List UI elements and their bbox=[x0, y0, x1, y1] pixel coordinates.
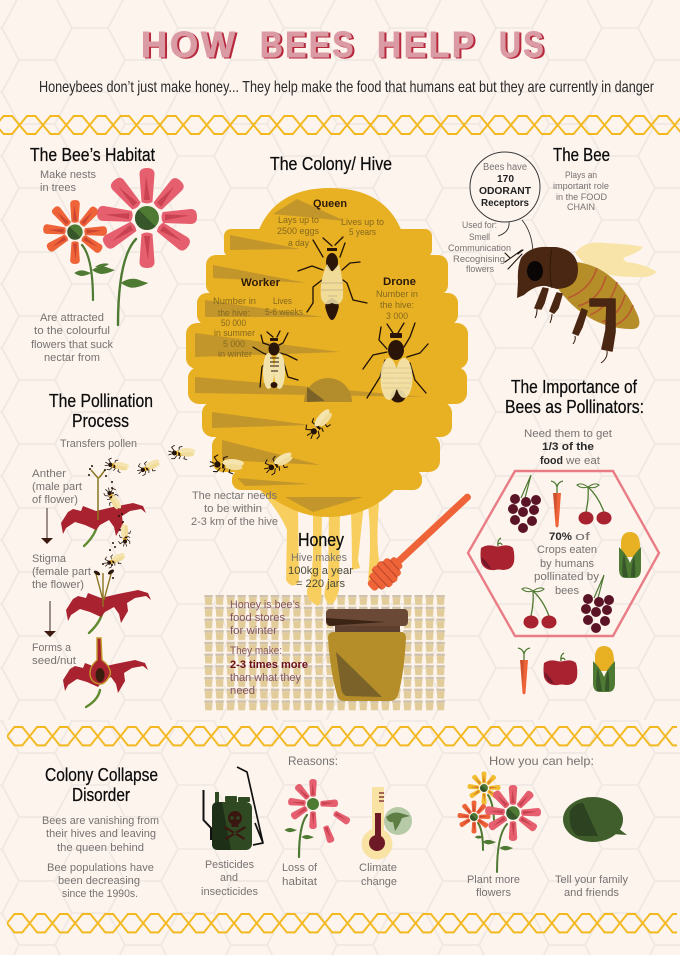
text: forms seed: Forms a bbox=[32, 642, 72, 654]
heading: importance: Bees as Pollinators: bbox=[505, 397, 644, 417]
text: food stores: food stores bbox=[230, 612, 286, 624]
icons: fruit and vegetables bbox=[480, 475, 641, 694]
callout: odorant receptors: 170 bbox=[497, 174, 514, 185]
text: tell family: Tell your family bbox=[555, 874, 628, 886]
honey drips bbox=[258, 488, 379, 606]
text: attracted: to the colourful bbox=[34, 325, 110, 337]
callout: odorant receptors: Bees have bbox=[483, 162, 527, 173]
hive labels: Drone bbox=[383, 276, 416, 288]
text: 70 percent bbox=[534, 531, 600, 597]
icon: flower with stigma bbox=[66, 542, 151, 633]
heading: importance: The Importance of bbox=[511, 377, 638, 397]
honeycomb divider top bbox=[0, 115, 680, 135]
text: food stores: They make: bbox=[230, 645, 282, 657]
hexagon frame bbox=[468, 471, 659, 636]
panel: pollination process bbox=[32, 391, 337, 707]
icon: honey jar bbox=[326, 609, 408, 701]
text: hive makes: Hive makes bbox=[291, 552, 347, 564]
text: anther: Anther bbox=[32, 468, 66, 480]
heading: colony: The Colony/ Hive bbox=[270, 154, 392, 174]
text: tell family bbox=[555, 874, 628, 899]
text: 70 percent: bees bbox=[555, 585, 579, 597]
honeycomb divider bottom bbox=[7, 913, 677, 933]
hive labels: Lives bbox=[273, 296, 292, 307]
honeycomb divider middle bbox=[7, 726, 677, 746]
text: transfers pollen: Transfers pollen bbox=[60, 438, 137, 450]
hive labels: 3 000 bbox=[386, 311, 408, 322]
icon: speech bubble bbox=[563, 797, 627, 842]
text: plays an important role: CHAIN bbox=[567, 202, 595, 212]
text: plays an important role bbox=[553, 170, 609, 212]
text: one third of food bbox=[524, 428, 612, 467]
text: populations: since the 1990s. bbox=[62, 888, 138, 900]
heading: pollination bbox=[49, 391, 153, 431]
text: nectar distance: 2-3 km of the hive bbox=[191, 516, 278, 528]
text: populations bbox=[47, 862, 154, 900]
text: used for: Communication bbox=[448, 243, 511, 253]
title: BEES bbox=[260, 24, 356, 65]
hive labels: Number in bbox=[376, 289, 418, 300]
text: nectar distance: to be within bbox=[204, 503, 262, 515]
heading: pollination: The Pollination bbox=[49, 391, 153, 411]
icon: damaged flower bbox=[284, 779, 351, 857]
hive labels: 5-6 weeks bbox=[265, 307, 303, 318]
text: vanishing: the queen behind bbox=[57, 842, 144, 854]
title: HOW bbox=[141, 24, 238, 65]
heading: honey: Honey bbox=[298, 530, 344, 550]
panel: honey bbox=[230, 485, 479, 701]
text: attracted: nectar from bbox=[44, 352, 100, 364]
panel: colony collapse disorder bbox=[42, 765, 159, 900]
text: used for: flowers bbox=[466, 264, 494, 274]
text: plant flowers: Plant more bbox=[467, 874, 520, 886]
hive labels: Number in bbox=[213, 296, 256, 307]
icon: orange flower bbox=[43, 200, 115, 300]
text: 70 percent: 70% bbox=[549, 531, 572, 543]
bee: worker bbox=[253, 331, 298, 389]
panel: bee's habitat bbox=[30, 145, 197, 364]
text: nests: Make nests bbox=[40, 169, 96, 181]
icon: honey dipper bbox=[362, 485, 479, 597]
text: plays an important role: in the FOOD bbox=[556, 192, 608, 202]
text: anther: of flower) bbox=[32, 494, 78, 506]
panel: importance as pollinators bbox=[468, 377, 659, 694]
text: anther bbox=[32, 468, 82, 506]
text: 70 percent: Crops eaten bbox=[537, 544, 597, 556]
bees: flying trail bbox=[102, 405, 337, 570]
text: plant flowers bbox=[467, 874, 520, 899]
text: loss of habitat bbox=[282, 862, 318, 888]
text: food stores: for winter bbox=[230, 625, 277, 637]
heading: collapse bbox=[45, 765, 158, 805]
text: food stores: 2-3 times more bbox=[230, 659, 308, 671]
text: forms seed: seed/nut bbox=[32, 655, 76, 667]
hive labels: 5 years bbox=[349, 227, 376, 238]
text: food stores: than what they bbox=[230, 672, 301, 684]
text: one third of food: food bbox=[540, 455, 563, 467]
text: attracted: Are attracted bbox=[40, 312, 104, 324]
text: stigma: (female part bbox=[32, 566, 91, 578]
text: pesticides bbox=[201, 859, 259, 898]
text: pesticides: and bbox=[220, 872, 238, 884]
text: food stores bbox=[230, 599, 308, 697]
text: anther: (male part bbox=[32, 481, 82, 493]
text: stigma bbox=[32, 553, 91, 591]
panel: the bee bbox=[448, 145, 657, 363]
text: climate change: change bbox=[361, 876, 397, 888]
hive shading bbox=[195, 199, 425, 512]
icon: flower with anther bbox=[61, 465, 146, 546]
text: used for: Smell bbox=[469, 232, 490, 242]
text: used for: Recognising bbox=[453, 254, 505, 264]
hive body bbox=[186, 188, 468, 517]
honey cups grid bbox=[204, 595, 447, 712]
heading: pollination: Process bbox=[72, 411, 129, 431]
text: nests: in trees bbox=[40, 182, 76, 194]
hive labels: in summer bbox=[214, 328, 255, 339]
hive labels: Queen bbox=[313, 198, 347, 210]
illustration: large bee bbox=[505, 242, 657, 363]
text: hive makes: = 220 jars bbox=[296, 578, 345, 590]
text: tell family: and friends bbox=[564, 887, 619, 899]
hive labels: Worker bbox=[241, 277, 281, 289]
text: populations: been decreasing bbox=[58, 875, 140, 887]
hive labels: a day bbox=[288, 238, 309, 249]
hive labels: the hive: bbox=[380, 300, 414, 311]
text: loss of habitat: habitat bbox=[282, 876, 317, 888]
text: plays an important role: Plays an bbox=[565, 170, 597, 180]
text: 70 percent: pollinated by bbox=[534, 571, 600, 583]
text: one third of food: we eat bbox=[565, 455, 600, 467]
text: stigma: the flower) bbox=[32, 579, 84, 591]
bee: queen bbox=[298, 237, 367, 320]
heading: help: How you can help: bbox=[489, 754, 594, 768]
hive labels: in winter bbox=[218, 349, 252, 360]
callout lines bbox=[498, 220, 533, 252]
text: nectar distance: The nectar needs bbox=[192, 490, 277, 502]
text: plays an important role: important role bbox=[553, 181, 609, 191]
text: plant flowers: flowers bbox=[476, 887, 512, 899]
heading: collapse: Disorder bbox=[72, 785, 130, 805]
heading: importance bbox=[505, 377, 644, 417]
text: hive makes bbox=[288, 552, 353, 590]
hive labels: 2500 eggs bbox=[277, 226, 319, 237]
heading: reasons: Reasons: bbox=[288, 754, 338, 768]
text: pesticides: insecticides bbox=[201, 886, 259, 898]
text: stigma: Stigma bbox=[32, 553, 67, 565]
title bbox=[141, 24, 546, 65]
hive labels: the hive: bbox=[218, 308, 250, 319]
text: vanishing bbox=[42, 815, 159, 854]
text: forms seed bbox=[32, 642, 76, 667]
text: 70 percent: by humans bbox=[540, 558, 594, 570]
text: food stores: need bbox=[230, 685, 255, 697]
panel: reasons bbox=[201, 754, 412, 898]
title: US bbox=[499, 24, 546, 65]
icon: bouquet bbox=[457, 772, 541, 872]
text: one third of food: Need them to get bbox=[524, 428, 612, 440]
text: climate change: Climate bbox=[359, 862, 397, 874]
bee: drone bbox=[363, 323, 428, 402]
text: 70 percent: of bbox=[575, 531, 592, 543]
text: loss of habitat: Loss of bbox=[282, 862, 318, 874]
hive labels: Lives up to bbox=[341, 217, 384, 228]
text: vanishing: their hives and leaving bbox=[46, 828, 156, 840]
panel: how you can help bbox=[457, 754, 628, 899]
text: attracted bbox=[31, 312, 113, 364]
panel: hive bbox=[186, 188, 468, 606]
text: used for: Used for: bbox=[462, 220, 497, 230]
hive labels bbox=[213, 198, 418, 360]
callout: odorant receptors bbox=[470, 152, 540, 222]
heading: collapse: Colony Collapse bbox=[45, 765, 158, 785]
text: vanishing: Bees are vanishing from bbox=[42, 815, 159, 827]
text: nectar distance bbox=[191, 490, 278, 528]
hive labels: 5 000 bbox=[223, 339, 245, 350]
icon: flower with seed bbox=[63, 638, 148, 707]
icon: pesticide sprayer bbox=[204, 767, 263, 850]
hive door bbox=[304, 378, 352, 402]
arrow: stigma to seed bbox=[44, 601, 56, 637]
hive labels: 50 000 bbox=[221, 318, 246, 329]
text: nests bbox=[40, 169, 96, 194]
arrow: anther to stigma bbox=[41, 508, 53, 544]
text: pesticides: Pesticides bbox=[205, 859, 254, 871]
text: used for bbox=[448, 220, 511, 274]
icon: thermometer and globe bbox=[362, 787, 412, 860]
hive labels: Lays up to bbox=[278, 215, 319, 226]
icon: pink flower bbox=[96, 168, 197, 325]
text: attracted: flowers that suck bbox=[31, 339, 113, 351]
text: climate change bbox=[359, 862, 397, 888]
heading: habitat: The Bee’s Habitat bbox=[30, 145, 155, 165]
text: food stores: Honey is bee’s bbox=[230, 599, 300, 611]
heading: the bee: The Bee bbox=[553, 145, 610, 165]
callout: odorant receptors: Receptors bbox=[481, 198, 529, 209]
text: populations: Bee populations have bbox=[47, 862, 154, 874]
title: HELP bbox=[377, 24, 477, 65]
text: hive makes: 100kg a year bbox=[288, 565, 353, 577]
text: one third of food: 1/3 of the bbox=[542, 441, 594, 453]
callout: odorant receptors: ODORANT bbox=[479, 186, 531, 197]
